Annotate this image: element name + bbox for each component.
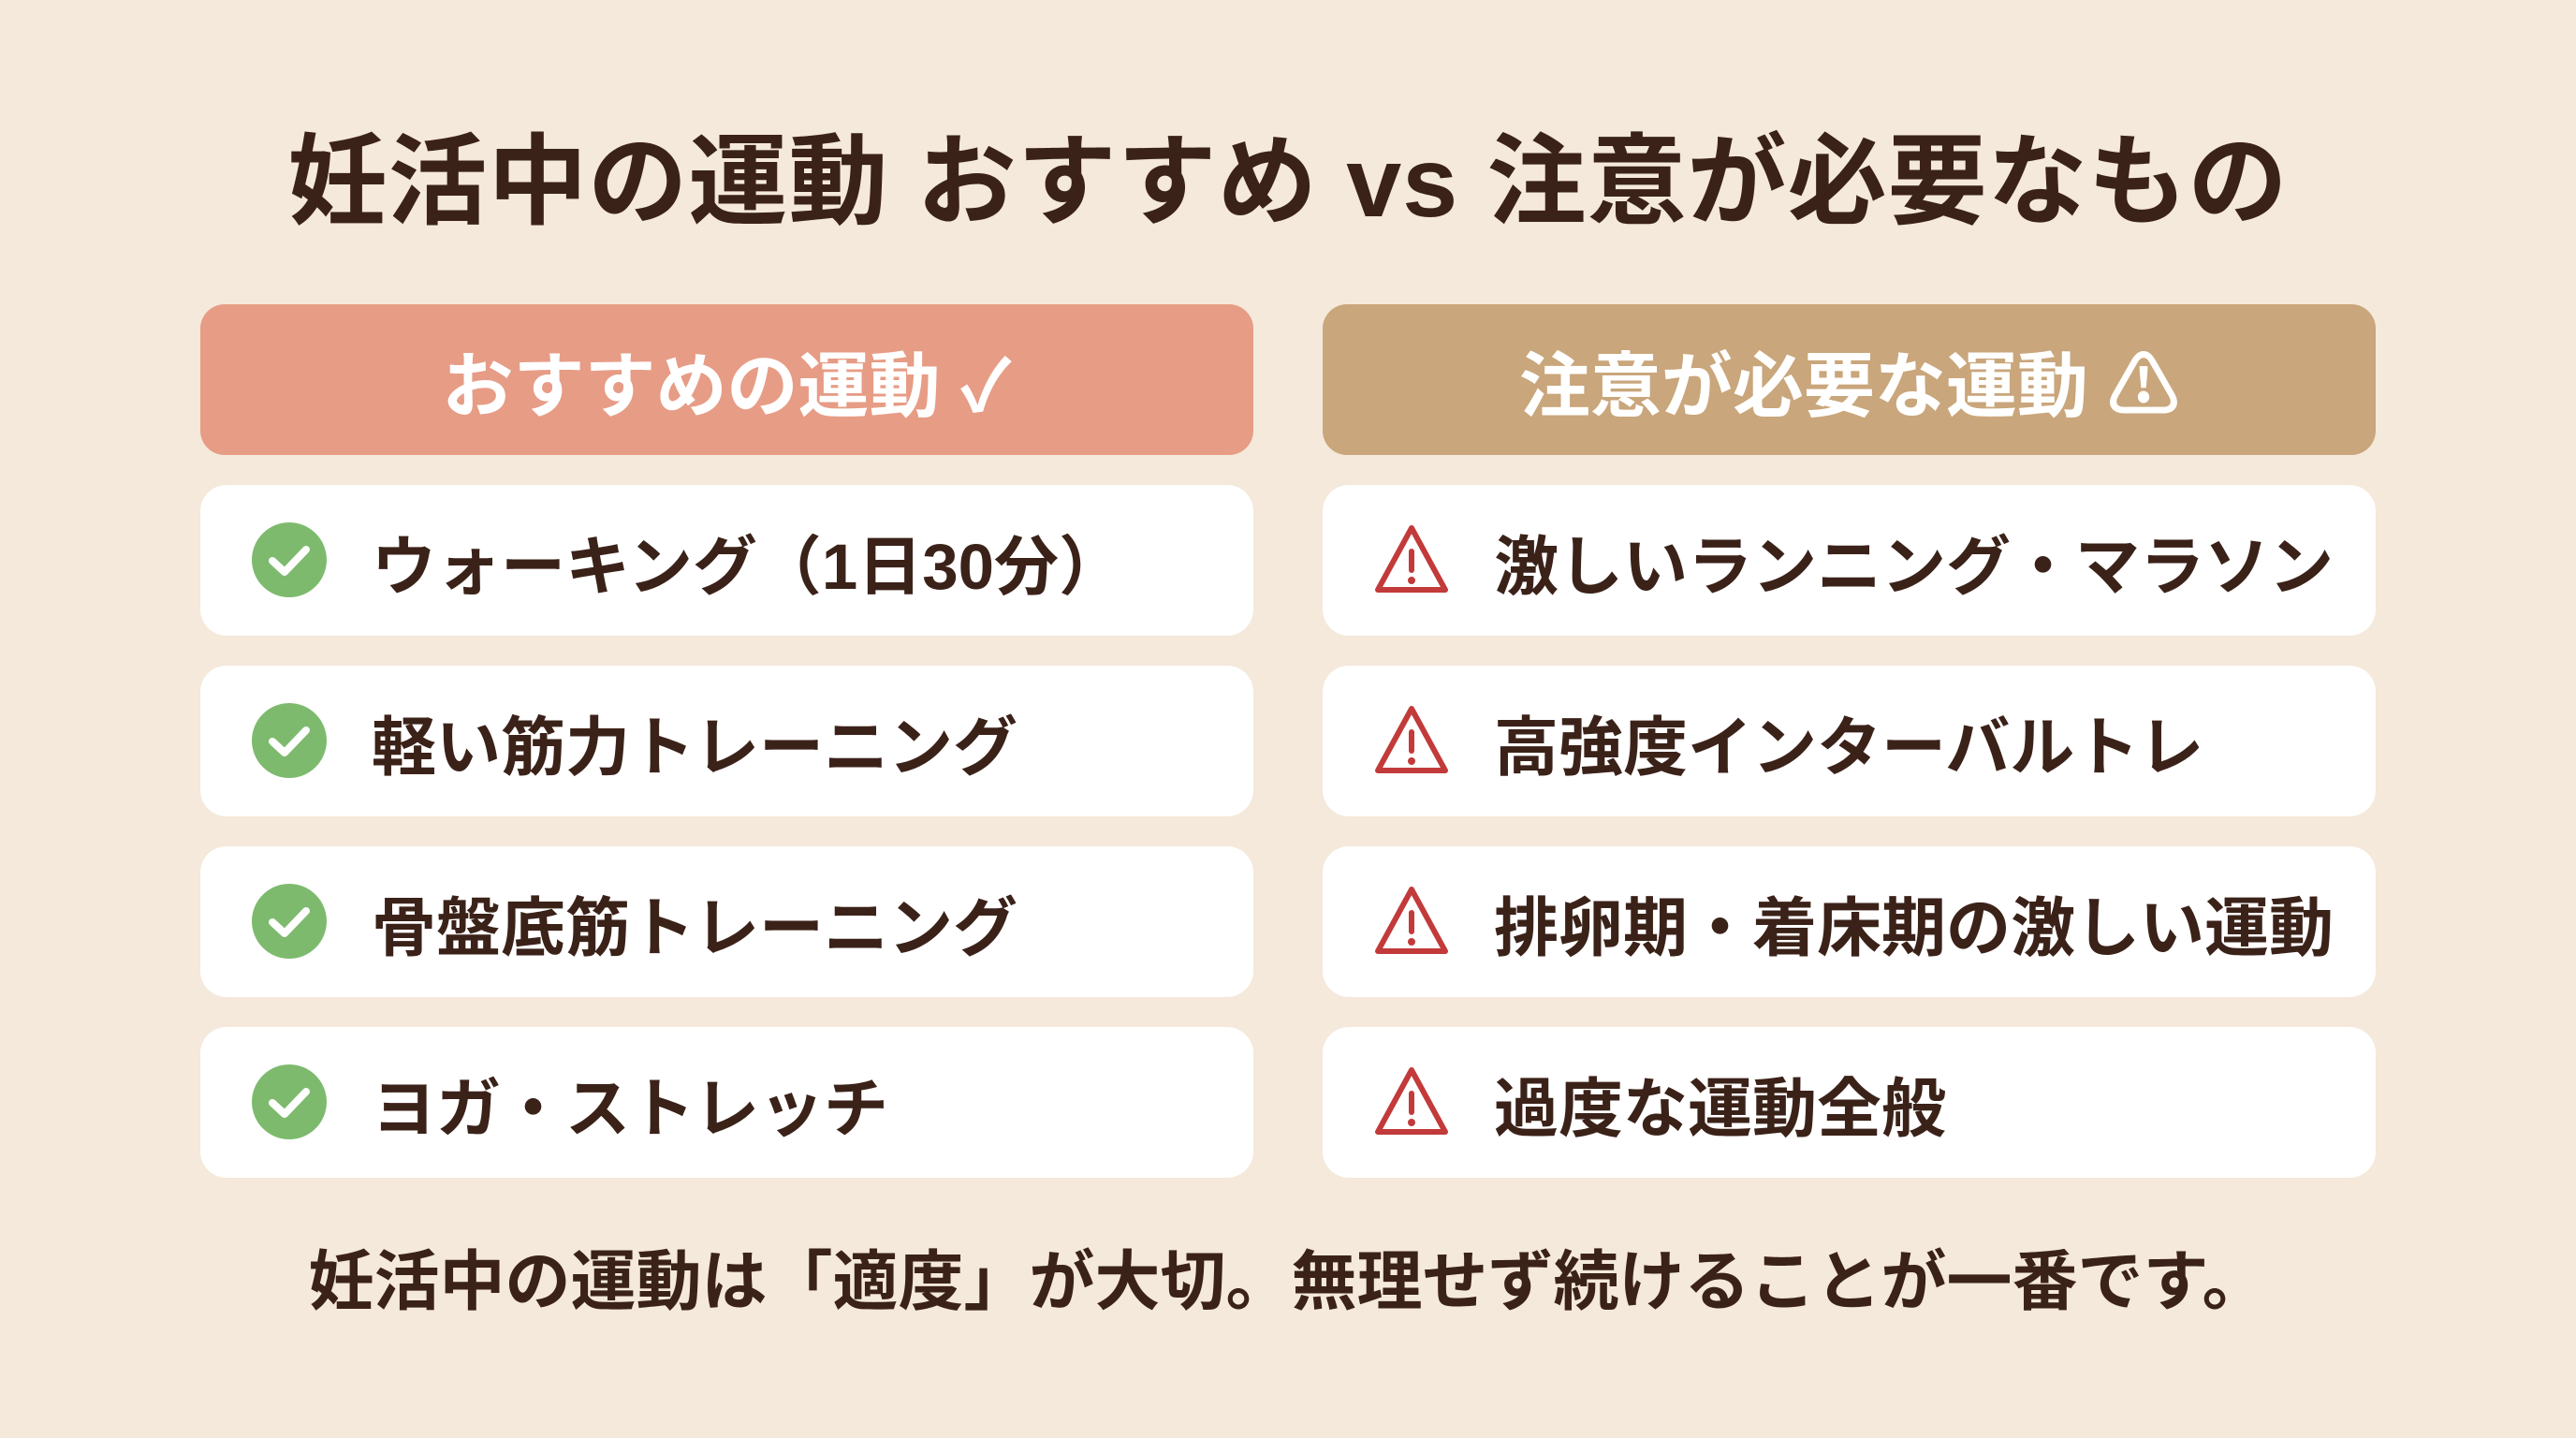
row: running xyxy=(1323,485,2376,636)
row: excessive: 過度な運動全般 xyxy=(1494,1073,1946,1144)
row: yoga: ヨガ・ストレッチ xyxy=(372,1073,888,1144)
row: light strength: 軽い筋力トレーニング xyxy=(372,712,1017,783)
row: light strength xyxy=(200,666,1253,816)
row: walking: ウォーキング（1日30分） xyxy=(372,530,1123,603)
row: HIIT: 高強度インターバルトレ xyxy=(1494,712,2203,783)
row: excessive xyxy=(1323,1027,2376,1178)
row: walking xyxy=(200,485,1253,636)
row: yoga xyxy=(200,1027,1253,1178)
row: HIIT xyxy=(1323,666,2376,816)
header: caution: 注意が必要な運動 ⚠ xyxy=(1519,346,2179,427)
row: running: 激しいランニング・マラソン xyxy=(1494,530,2334,603)
row: pelvic floor xyxy=(200,846,1253,997)
header: recommended xyxy=(200,304,1253,455)
row: ovulation: 排卵期・着床期の激しい運動 xyxy=(1494,891,2334,964)
header: caution xyxy=(1323,304,2376,455)
footer note: 妊活中の運動は「適度」が大切。無理せず続けることが一番です。 xyxy=(309,1245,2267,1318)
header: recommended: おすすめの運動 ✓ xyxy=(442,346,1012,427)
title: 妊活中の運動 おすすめ vs 注意が必要なもの xyxy=(287,127,2289,238)
row: pelvic floor: 骨盤底筋トレーニング xyxy=(372,891,1017,964)
row: ovulation xyxy=(1323,846,2376,997)
